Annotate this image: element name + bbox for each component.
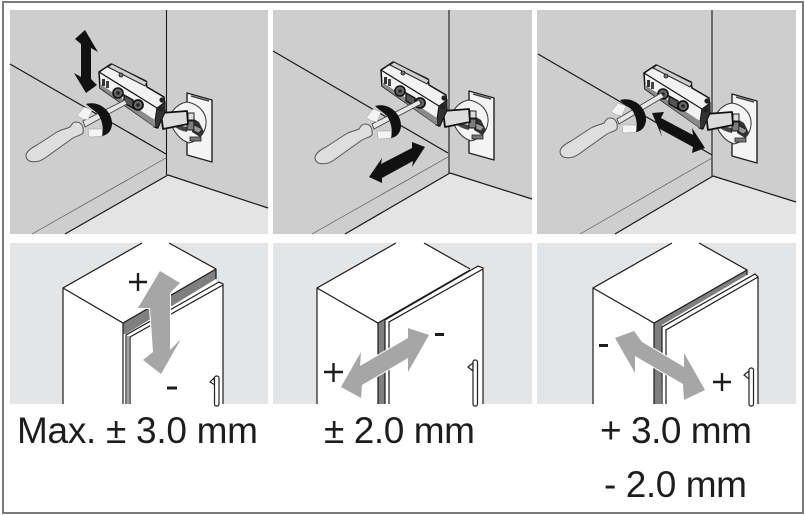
arrow: grey vertical	[138, 271, 181, 374]
icon: door handle	[468, 360, 478, 406]
label: side tolerance: ± 2.0 mm	[324, 410, 475, 451]
minus sign	[167, 386, 177, 390]
minus sign	[435, 333, 444, 336]
minus sign	[599, 344, 608, 347]
plus sign	[713, 373, 731, 391]
label: max height tolerance: Max. ± 3.0 mm	[17, 410, 258, 451]
panel: cabinet depth result	[537, 243, 796, 406]
panel: cabinet side result	[273, 243, 532, 406]
panel: cabinet height result	[10, 243, 268, 406]
arrow: diagonal black	[369, 142, 425, 183]
label: depth minus tolerance: - 2.0 mm	[604, 464, 747, 505]
plus sign	[324, 363, 343, 382]
panel: height adjustment hinge	[10, 10, 268, 234]
arrow: grey depth	[615, 331, 705, 400]
arrow: depth black	[652, 112, 705, 153]
icon: door handle	[210, 376, 219, 406]
icon: door handle	[744, 368, 754, 406]
label: depth plus tolerance: + 3.0 mm	[600, 410, 752, 451]
panel: depth adjustment hinge	[537, 10, 796, 234]
arrow: grey diagonal	[341, 328, 429, 398]
plus sign	[129, 273, 147, 291]
arrow: vertical black	[74, 30, 98, 93]
panel: side adjustment hinge	[273, 10, 532, 234]
